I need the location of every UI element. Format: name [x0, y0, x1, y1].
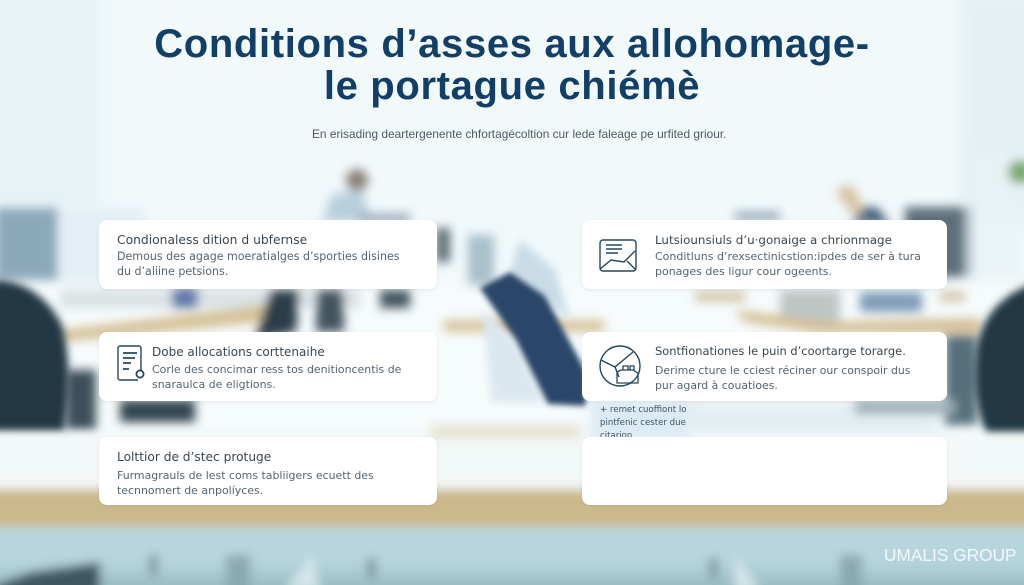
card 4 text: Derime cture le cciest réciner our conspoir dus — [655, 364, 910, 377]
small note: citarion — [600, 430, 632, 440]
small note: pintfenic cester due — [600, 418, 686, 428]
navy jacket — [480, 272, 586, 406]
card 2 text — [655, 250, 921, 278]
panel: card 2 top right — [582, 220, 947, 289]
card 2 heading: Lutsiounsiuls d’u·gonaige a chrionmage — [655, 233, 892, 247]
card 4 text: pur agard à couatioes. — [655, 379, 778, 392]
card 2 text: Conditluns d’rexsectinicstion:ipdes de ser à tura — [655, 250, 921, 262]
card 4 text — [655, 364, 910, 392]
small note: + remet cuoffiont lo — [600, 404, 687, 414]
card 4 heading: Sontfionationes le puin d’coortarge torarge. — [655, 344, 906, 358]
icon: globe with luggage — [599, 345, 641, 387]
card 1 heading: Condionaless dition d ubfernse — [117, 233, 307, 247]
card 3 heading: Dobe allocations corttenaihe — [152, 345, 325, 359]
logo text: UMALIS GROUP — [884, 545, 1017, 565]
card 1 text: du d’aliine petsions. — [117, 264, 228, 278]
card 5 heading: Lolttior de d’stec protuge — [117, 450, 271, 464]
title — [154, 22, 870, 108]
card 3 text: Corle des concimar ress tos denitioncentis de — [152, 363, 401, 376]
card 5 text: tecnnomert de anpolíyces. — [117, 484, 263, 497]
card 2 text: ponages des ligur cour ogeents. — [655, 264, 832, 278]
title: le portague chiémè — [324, 64, 700, 108]
small note — [600, 404, 687, 440]
title: Conditions d’asses aux allohomage- — [154, 22, 870, 66]
icon: envelope document — [599, 239, 637, 272]
panel: card 4 middle right — [582, 332, 947, 401]
card 1 text — [117, 250, 400, 278]
panel: card 6 empty bottom right — [582, 437, 947, 505]
panel: card 1 top left — [99, 220, 437, 289]
card 5 text: Furmagrauls de lest coms tabliigers ecuett des — [117, 469, 374, 482]
panel: card 3 middle left — [99, 332, 437, 401]
subtitle: En erisading deartergenente chfortagécoltion cur lede faleage pe urfited griour. — [312, 127, 726, 141]
card 1 text: Demous des agage moeratialges d’sporties disines — [117, 250, 400, 262]
card 5 text — [117, 469, 374, 497]
card 3 text — [152, 363, 401, 391]
icon: document with badge — [117, 345, 144, 381]
panel: card 5 bottom left — [99, 437, 437, 505]
card 3 text: snaraulca de eligtions. — [152, 378, 276, 391]
